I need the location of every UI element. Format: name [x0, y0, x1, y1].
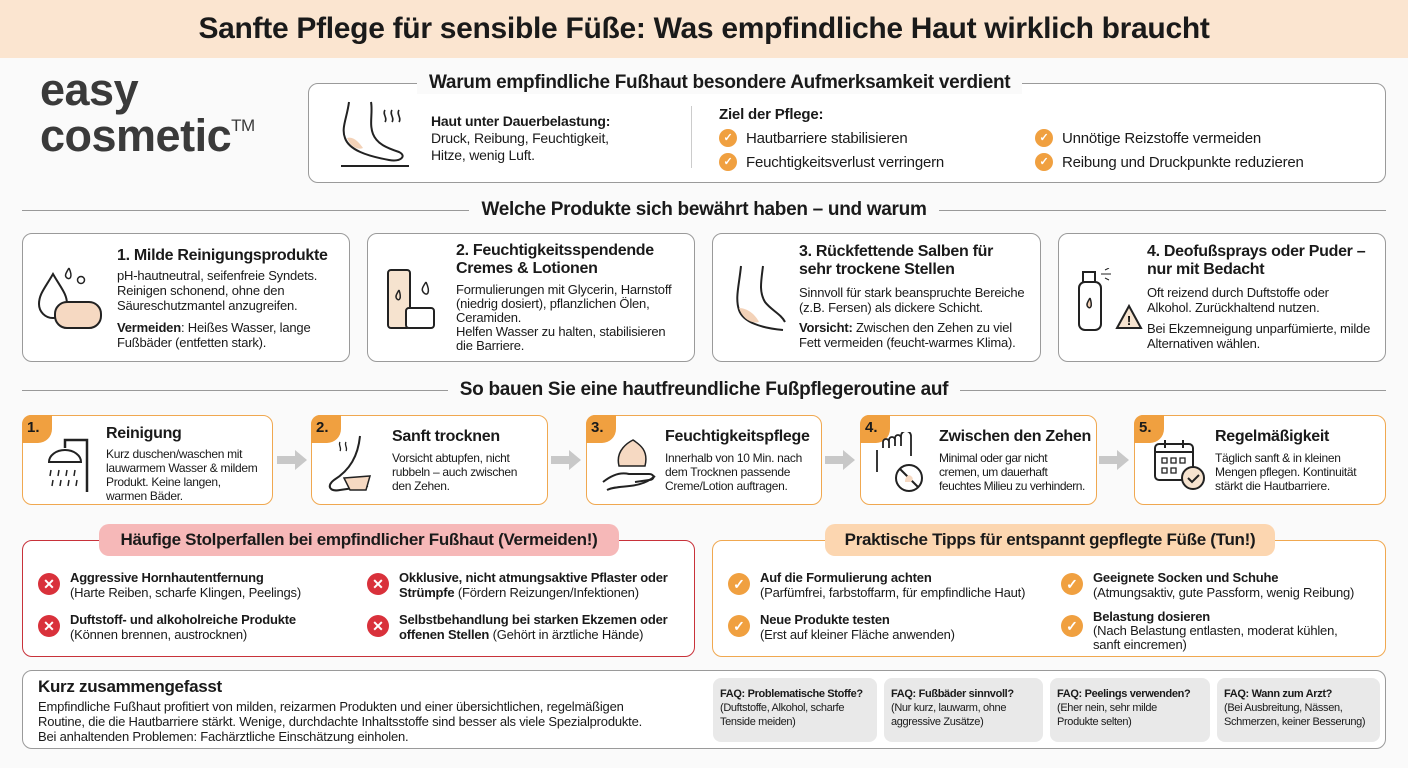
- panel: pitfalls: Selbstbehandlung bei starken Ekzemen oder: [399, 612, 667, 627]
- text: load: Haut unter Dauerbelastung:: [431, 113, 610, 129]
- panel: tips: ✓: [1066, 618, 1078, 634]
- goals: Reibung und Druckpunkte reduzieren: [1062, 154, 1304, 171]
- step 4: [860, 415, 1097, 505]
- arrow: [1099, 450, 1129, 470]
- section heading: routine: [22, 390, 1386, 391]
- title banner: [0, 0, 1408, 58]
- card 2: [367, 233, 695, 362]
- step 5: Mengen pflegen. Kontinuität: [1215, 465, 1356, 479]
- panel: summary: Routine, die die Hautbarriere stärkt. Wenige, durchdachte Inhaltsstoffe sind besser als viele Spezialprodukte.: [38, 714, 642, 729]
- card 4: nur mit Bedacht: [1147, 261, 1264, 278]
- panel: tips: Auf die Formulierung achten: [760, 570, 932, 585]
- logo: easy: [40, 64, 138, 115]
- goals: Ziel der Pflege:: [719, 106, 823, 123]
- text: load: Hitze, wenig Luft.: [431, 147, 535, 163]
- icon: toes no cream: [876, 432, 923, 492]
- icon: hand with cream: [602, 439, 656, 491]
- panel: pitfalls: Okklusive, nicht atmungsaktive Pflaster oder: [399, 570, 668, 585]
- step 1: Reinigung: [106, 425, 182, 442]
- panel: tips: (Atmungsaktiv, gute Passform, wenig Reibung): [1093, 585, 1354, 600]
- faq 4: (Bei Ausbreitung, Nässen,: [1224, 702, 1342, 714]
- goals: ✓: [723, 132, 733, 144]
- panel: tips: (Erst auf kleiner Fläche anwenden): [760, 627, 955, 642]
- heading pill: Häufige Stolperfallen bei empfindlicher Fußhaut (Vermeiden!): [121, 530, 597, 549]
- step 2: den Zehen.: [392, 479, 450, 493]
- text: load: Druck, Reibung, Feuchtigkeit,: [431, 130, 609, 146]
- step 4: feuchtes Milieu zu verhindern.: [939, 479, 1085, 493]
- goals: ✓: [723, 156, 733, 168]
- heading pill: Praktische Tipps für entspannt gepflegte Füße (Tun!): [845, 530, 1255, 549]
- card 3: sehr trockene Stellen: [799, 261, 955, 278]
- card 4: Alkohol. Zurückhaltend nutzen.: [1147, 300, 1320, 315]
- card 4: [1058, 233, 1386, 362]
- arrow: [551, 450, 581, 470]
- step 3: Innerhalb von 10 Min. nach: [665, 451, 802, 465]
- panel: pitfalls: ✕: [43, 576, 55, 592]
- logo: cosmeticTM: [40, 110, 255, 161]
- panel: pitfalls: ✕: [372, 618, 384, 634]
- panel: summary: Empfindliche Fußhaut profitiert von milden, reizarmen Produkten und einer übersichtlichen, regelmäßigen: [38, 699, 624, 714]
- step 5: Täglich sanft & in kleinen: [1215, 451, 1341, 465]
- panel: tips: ✓: [733, 576, 745, 592]
- panel: tips: ✓: [733, 618, 745, 634]
- faq 3: (Eher nein, sehr milde: [1057, 702, 1157, 714]
- faq 1: FAQ: Problematische Stoffe?: [720, 688, 863, 700]
- step 1: 1.: [27, 419, 40, 436]
- panel: pitfalls: [22, 540, 695, 657]
- text: Welche Produkte sich bewährt haben – und warum: [481, 199, 927, 220]
- card 2: Ceramiden.: [456, 310, 521, 325]
- step 4: 4.: [865, 419, 878, 436]
- step 1: lauwarmem Wasser & mildem: [106, 461, 257, 475]
- step 5: Regelmäßigkeit: [1215, 428, 1329, 445]
- card 1: [22, 233, 350, 362]
- step 1: [22, 415, 273, 505]
- card 1: Reinigen schonend, ohne den: [117, 283, 284, 298]
- step 2: 2.: [316, 419, 329, 436]
- panel: pitfalls: (Können brennen, austrocknen): [70, 627, 247, 642]
- step 5: 5.: [1139, 419, 1152, 436]
- icon: foot drying: [328, 436, 371, 492]
- panel: tips: (Nach Belastung entlasten, moderat kühlen,: [1093, 623, 1338, 638]
- card 4: Bei Ekzemneigung unparfümierte, milde: [1147, 321, 1370, 336]
- panel: tips: Belastung dosieren: [1093, 609, 1210, 624]
- step 5: [1134, 415, 1386, 505]
- goals: Hautbarriere stabilisieren: [746, 130, 908, 147]
- text: load: [431, 113, 610, 163]
- step 4: Zwischen den Zehen: [939, 428, 1091, 445]
- faq 3: Produkte selten): [1057, 716, 1132, 728]
- faq 2: FAQ: Fußbäder sinnvoll?: [891, 688, 1014, 700]
- card 3: [712, 233, 1041, 362]
- heading: Warum empfindliche Fußhaut besondere Aufmerksamkeit verdient: [429, 72, 1010, 93]
- icon: spray: [1078, 268, 1143, 331]
- faq 3: FAQ: Peelings verwenden?: [1057, 688, 1190, 700]
- step 1: warmen Bäder.: [106, 489, 183, 503]
- icon: soap: [38, 268, 102, 329]
- panel: summary: Kurz zusammengefasst: [38, 677, 222, 696]
- faq 1: [713, 678, 877, 742]
- card 1: Fußbäder (entfetten stark).: [117, 335, 266, 350]
- faq 2: [884, 678, 1043, 742]
- goals: Unnötige Reizstoffe vermeiden: [1062, 130, 1261, 147]
- faq 4: [1217, 678, 1380, 742]
- step 3: 3.: [591, 419, 604, 436]
- card 4: Alternativen wählen.: [1147, 336, 1260, 351]
- card 2: Cremes & Lotionen: [456, 260, 598, 277]
- card 1: Vermeiden: Heißes Wasser, lange: [117, 320, 310, 335]
- panel: pitfalls: Strümpfe (Fördern Reizungen/Infektionen): [399, 585, 639, 600]
- panel: why: [308, 83, 1386, 183]
- card 2: (niedrig dosiert), pflanzlichen Ölen,: [456, 296, 649, 311]
- panel: pitfalls: Duftstoff- und alkoholreiche Produkte: [70, 612, 296, 627]
- card 2: Helfen Wasser zu halten, stabilisieren: [456, 324, 665, 339]
- card 3: Vorsicht: Zwischen den Zehen zu viel: [799, 320, 1012, 335]
- card 2: die Barriere.: [456, 338, 524, 353]
- faq 4: FAQ: Wann zum Arzt?: [1224, 688, 1332, 700]
- card 3: (z.B. Fersen) als dickere Schicht.: [799, 300, 983, 315]
- step 1: Kurz duschen/waschen mit: [106, 447, 242, 461]
- panel: pitfalls: Aggressive Hornhautentfernung: [70, 570, 264, 585]
- goals: ✓: [1039, 132, 1049, 144]
- step 2: rubbeln – auch zwischen: [392, 465, 517, 479]
- goals: Feuchtigkeitsverlust verringern: [746, 154, 944, 171]
- step 3: Feuchtigkeitspflege: [665, 428, 810, 445]
- step 2: Vorsicht abtupfen, nicht: [392, 451, 510, 465]
- step 4: Minimal oder gar nicht: [939, 451, 1047, 465]
- goals: [719, 106, 1304, 171]
- card 4: 4. Deofußsprays oder Puder –: [1147, 243, 1365, 260]
- title banner: Sanfte Pflege für sensible Füße: Was empfindliche Haut wirklich braucht: [198, 12, 1210, 45]
- card 1: Säureschutzmantel anzugreifen.: [117, 298, 297, 313]
- panel: summary: [22, 670, 1386, 749]
- panel: pitfalls: ✕: [43, 618, 55, 634]
- panel: tips: (Parfümfrei, farbstoffarm, für empfindliche Haut): [760, 585, 1025, 600]
- faq 3: [1050, 678, 1210, 742]
- panel: tips: sanft eincremen): [1093, 637, 1187, 652]
- card 4: Oft reizend durch Duftstoffe oder: [1147, 285, 1329, 300]
- logo: [40, 64, 255, 161]
- panel: tips: Neue Produkte testen: [760, 612, 890, 627]
- faq 1: (Duftstoffe, Alkohol, scharfe: [720, 702, 844, 714]
- card 3: Sinnvoll für stark beanspruchte Bereiche: [799, 285, 1024, 300]
- icon: cream tube: [387, 269, 435, 329]
- arrow: [277, 450, 307, 470]
- step 5: stärkt die Hautbarriere.: [1215, 479, 1330, 493]
- step 3: [586, 415, 822, 505]
- card 3: Fett vermeiden (feucht-warmes Klima).: [799, 335, 1016, 350]
- icon: calendar: [1154, 440, 1205, 490]
- arrow: [825, 450, 855, 470]
- section heading: products: [22, 210, 1386, 211]
- faq 2: aggressive Zusätze): [891, 716, 983, 728]
- card 2: Formulierungen mit Glycerin, Harnstoff: [456, 282, 671, 297]
- text: So bauen Sie eine hautfreundliche Fußpflegeroutine auf: [460, 379, 948, 400]
- icon: spray: !: [1127, 313, 1131, 328]
- goals: ✓: [1039, 156, 1049, 168]
- panel: tips: ✓: [1066, 576, 1078, 592]
- icon: heel: [736, 266, 786, 331]
- panel: pitfalls: ✕: [372, 576, 384, 592]
- heading pill: [825, 524, 1275, 556]
- icon: shower: [48, 438, 88, 492]
- step 4: cremen, um dauerhaft: [939, 465, 1047, 479]
- faq 1: Tenside meiden): [720, 716, 795, 728]
- panel: summary: Bei anhaltenden Problemen: Fachärztliche Einschätzung einholen.: [38, 729, 408, 744]
- panel: tips: [712, 540, 1386, 657]
- card 2: 2. Feuchtigkeitsspendende: [456, 242, 654, 259]
- card 1: pH-hautneutral, seifenfreie Syndets.: [117, 268, 317, 283]
- step 2: [311, 415, 548, 505]
- step 3: Creme/Lotion auftragen.: [665, 479, 788, 493]
- step 3: dem Trocknen passende: [665, 465, 790, 479]
- icon: foot: [341, 102, 409, 167]
- faq 4: Schmerzen, keiner Besserung): [1224, 716, 1365, 728]
- card 1: 1. Milde Reinigungsprodukte: [117, 247, 328, 264]
- step 2: Sanft trocknen: [392, 428, 500, 445]
- step 1: Produkt. Keine langen,: [106, 475, 221, 489]
- heading pill: [99, 524, 619, 556]
- panel: pitfalls: offenen Stellen (Gehört in ärztliche Hände): [399, 627, 643, 642]
- panel: tips: Geeignete Socken und Schuhe: [1093, 570, 1278, 585]
- panel: pitfalls: (Harte Reiben, scharfe Klingen, Peelings): [70, 585, 301, 600]
- card 3: 3. Rückfettende Salben für: [799, 243, 993, 260]
- faq 2: (Nur kurz, lauwarm, ohne: [891, 702, 1006, 714]
